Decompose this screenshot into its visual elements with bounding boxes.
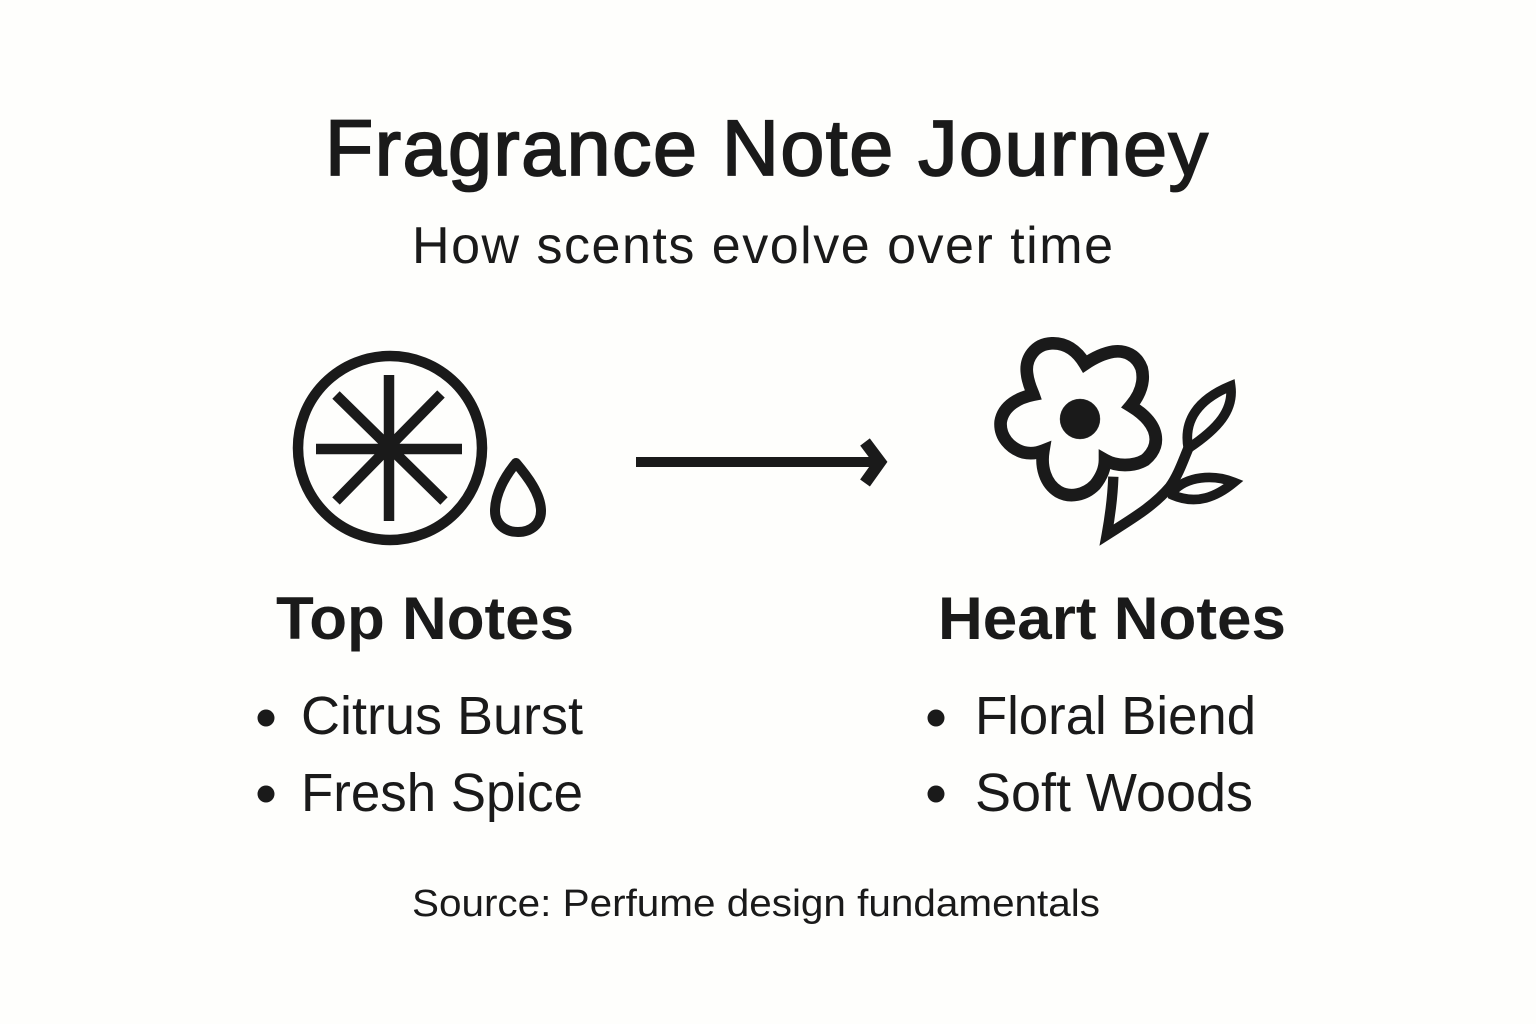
bullet [258, 710, 274, 726]
list: top notes [258, 686, 583, 823]
subtitle: How scents evolve over time [412, 217, 1113, 275]
source note: Source: Perfume design fundamentals [412, 883, 1100, 925]
item: soft woods: Soft Woods [975, 763, 1253, 823]
title: Fragrance Note Journey [325, 103, 1208, 192]
heading: top notes: Top Notes [276, 585, 574, 652]
heading: heart notes: Heart Notes [938, 585, 1286, 652]
bullet [928, 710, 944, 726]
icon: flower with leaves [1001, 343, 1234, 535]
icon: citrus slice with droplet [298, 356, 541, 540]
droplet [495, 463, 541, 532]
bullet [928, 786, 944, 802]
citrus rind [298, 356, 482, 540]
item: citrus burst: Citrus Burst [301, 686, 583, 746]
citrus segments [316, 375, 462, 521]
flower petals [1001, 343, 1156, 495]
upper leaf [1187, 386, 1231, 448]
list: heart notes [928, 686, 1256, 823]
flower centre [1060, 399, 1100, 439]
item: fresh spice: Fresh Spice [301, 763, 583, 823]
stem [1107, 448, 1188, 535]
item: floral blend: Floral Biend [975, 686, 1256, 746]
arrow [636, 442, 880, 483]
lower leaf [1173, 477, 1234, 500]
bullet [258, 786, 274, 802]
